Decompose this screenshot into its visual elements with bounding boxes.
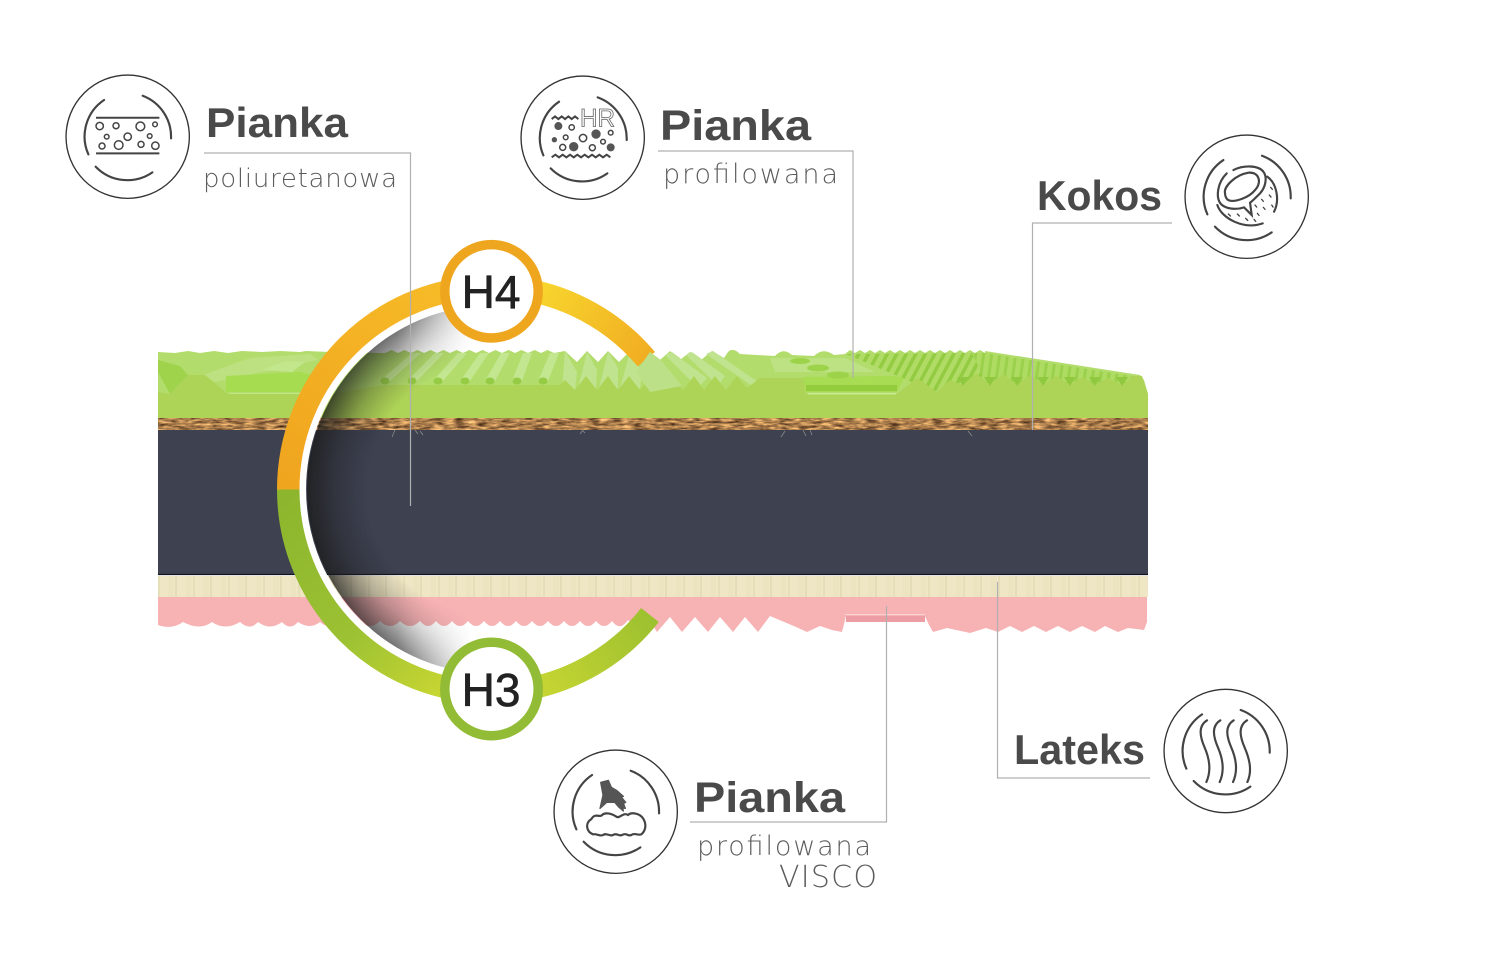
leader line: poliuretanowa — [204, 153, 410, 506]
coir hairs — [392, 430, 972, 437]
icon: latex waves — [1164, 689, 1287, 813]
badge: H4: H4 — [462, 266, 520, 318]
label: Pianka profilowana — [660, 102, 838, 190]
leader line: profilowana VISCO — [690, 606, 886, 822]
leader line: Kokos — [1032, 223, 1172, 430]
label: Pianka profilowana: Pianka — [660, 102, 812, 150]
egg-crate dots — [380, 378, 548, 384]
label: Pianka profilowana VISCO: Pianka — [694, 774, 846, 822]
egg-crate ribs right — [846, 353, 1000, 392]
large peaks — [562, 351, 761, 390]
icon: HR foam: HR — [580, 105, 615, 133]
front solid foam — [158, 373, 1148, 418]
peak overlapping ring end — [636, 352, 682, 392]
label: Lateks: Lateks — [1014, 726, 1145, 773]
layer: profiled green foam — [158, 350, 1148, 418]
ring: H3 side — [288, 490, 650, 692]
badge: H3: H3 — [462, 664, 520, 716]
egg-crate notches — [957, 377, 1128, 386]
leader line: profilowana — [658, 151, 853, 378]
badge: H4 — [445, 245, 538, 338]
layer: coconut coir — [158, 418, 1148, 430]
inner shadow of the cut-away circle — [307, 312, 463, 668]
ring: H4 side — [288, 287, 646, 490]
layer: pink visco foam — [158, 597, 1147, 633]
mattress cross-section — [158, 350, 1148, 633]
label: Pianka poliuretanowa: Pianka — [206, 99, 349, 146]
label: Pianka profilowana VISCO — [694, 774, 877, 895]
badge: H3 — [445, 642, 538, 736]
white inner band — [302, 303, 466, 676]
label: Pianka poliuretanowa — [203, 99, 397, 194]
label: Pianka profilowana VISCO: VISCO — [779, 860, 877, 895]
layer: dark polyurethane foam — [158, 430, 1148, 574]
icon: hand on visco foam — [554, 750, 677, 873]
flat recess block — [770, 358, 904, 394]
icon: coconut — [1185, 135, 1308, 258]
layer: latex — [158, 576, 1148, 597]
label: Kokos: Kokos — [1037, 172, 1162, 219]
icon: foam — [66, 75, 189, 198]
egg-crate ribs middle — [380, 353, 559, 381]
label: Pianka profilowana: profilowana — [663, 159, 838, 190]
label: Pianka profilowana VISCO: profilowana — [697, 831, 871, 862]
firmness ring — [288, 287, 682, 692]
leader line: Lateks — [998, 582, 1150, 778]
icon: HR foam — [521, 76, 644, 199]
label: Pianka poliuretanowa: poliuretanowa — [203, 164, 397, 194]
left flat profile facets — [158, 354, 318, 395]
